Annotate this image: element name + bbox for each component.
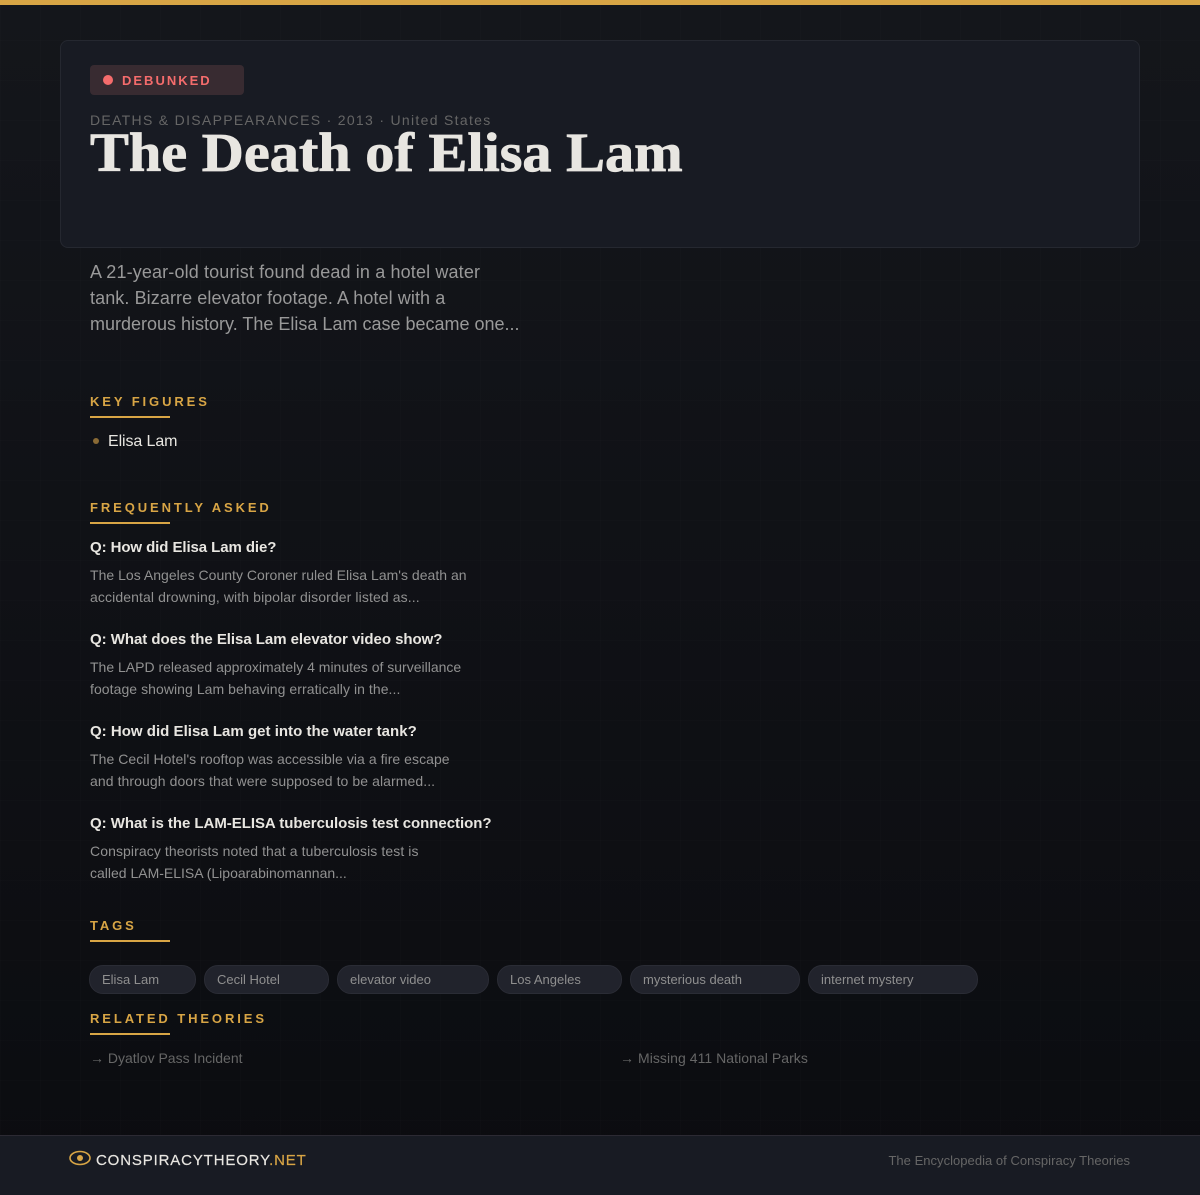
tag: internet mystery: internet mystery	[821, 972, 913, 987]
top accent bar	[0, 0, 1200, 5]
faq 3 answer: and through doors that were supposed to be alarmed...	[90, 773, 435, 789]
faq 2 answer	[90, 659, 461, 697]
footer tagline: The Encyclopedia of Conspiracy Theories	[888, 1153, 1130, 1168]
tag: elevator video	[337, 965, 489, 994]
faq 1 answer	[90, 567, 467, 605]
faq 1 question: Q: How did Elisa Lam die?	[90, 539, 276, 556]
title: The Death of Elisa Lam	[90, 122, 683, 183]
tag: elevator video: elevator video	[350, 972, 431, 987]
heading: frequently asked: FREQUENTLY ASKED	[90, 500, 272, 515]
status badge: debunked	[90, 65, 244, 95]
faq 4 answer: Conspiracy theorists noted that a tuberculosis test is	[90, 843, 419, 859]
related link: Dyatlov Pass Incident: → Dyatlov Pass Incident	[90, 1050, 243, 1066]
tag: Elisa Lam: Elisa Lam	[102, 972, 159, 987]
faq 4 answer	[90, 843, 419, 881]
header panel	[60, 40, 1140, 248]
summary paragraph: tank. Bizarre elevator footage. A hotel with a	[90, 288, 445, 308]
category and year meta line: DEATHS & DISAPPEARANCES · 2013 · United States	[90, 112, 492, 128]
bullet	[93, 438, 99, 444]
key figure: Elisa Lam	[93, 433, 177, 450]
tag: mysterious death	[630, 965, 800, 994]
tag: Cecil Hotel: Cecil Hotel	[217, 972, 280, 987]
summary paragraph: murderous history. The Elisa Lam case became one...	[90, 314, 520, 334]
name: Elisa Lam	[108, 433, 177, 450]
faq 3 question: Q: How did Elisa Lam get into the water tank?	[90, 723, 417, 740]
footer bar	[0, 1135, 1200, 1195]
tag: Los Angeles	[497, 965, 622, 994]
heading: key figures: KEY FIGURES	[90, 394, 210, 409]
heading: related theories: RELATED THEORIES	[90, 1011, 267, 1026]
faq 2 answer: The LAPD released approximately 4 minutes of surveillance	[90, 659, 461, 675]
tag: Elisa Lam	[89, 965, 196, 994]
faq 4 question: Q: What is the LAM-ELISA tuberculosis test connection?	[90, 815, 491, 832]
faq 1 answer: The Los Angeles County Coroner ruled Elisa Lam's death an	[90, 567, 467, 583]
tag: mysterious death: mysterious death	[643, 972, 742, 987]
tag: Cecil Hotel	[204, 965, 329, 994]
faq 1 answer: accidental drowning, with bipolar disorder listed as...	[90, 589, 420, 605]
faq 4 answer: called LAM-ELISA (Lipoarabinomannan...	[90, 865, 347, 881]
logo wordmark: CONSPIRACYTHEORY.NET	[96, 1152, 307, 1169]
related link: Missing 411 National Parks: → Missing 411 National Parks	[620, 1050, 808, 1066]
faq 2 answer: footage showing Lam behaving erratically in the...	[90, 681, 400, 697]
badge dot	[103, 75, 113, 85]
summary paragraph: A 21-year-old tourist found dead in a hotel water	[90, 262, 480, 282]
icon: eye logo	[69, 1150, 91, 1166]
faq 2 question: Q: What does the Elisa Lam elevator video show?	[90, 631, 442, 648]
tag: Los Angeles: Los Angeles	[510, 972, 581, 987]
heading: tags: TAGS	[90, 918, 137, 933]
faq 3 answer: The Cecil Hotel's rooftop was accessible via a fire escape	[90, 751, 450, 767]
badge label: DEBUNKED	[122, 73, 212, 88]
summary paragraph	[90, 262, 520, 334]
faq 3 answer	[90, 751, 450, 789]
tag: internet mystery	[808, 965, 978, 994]
